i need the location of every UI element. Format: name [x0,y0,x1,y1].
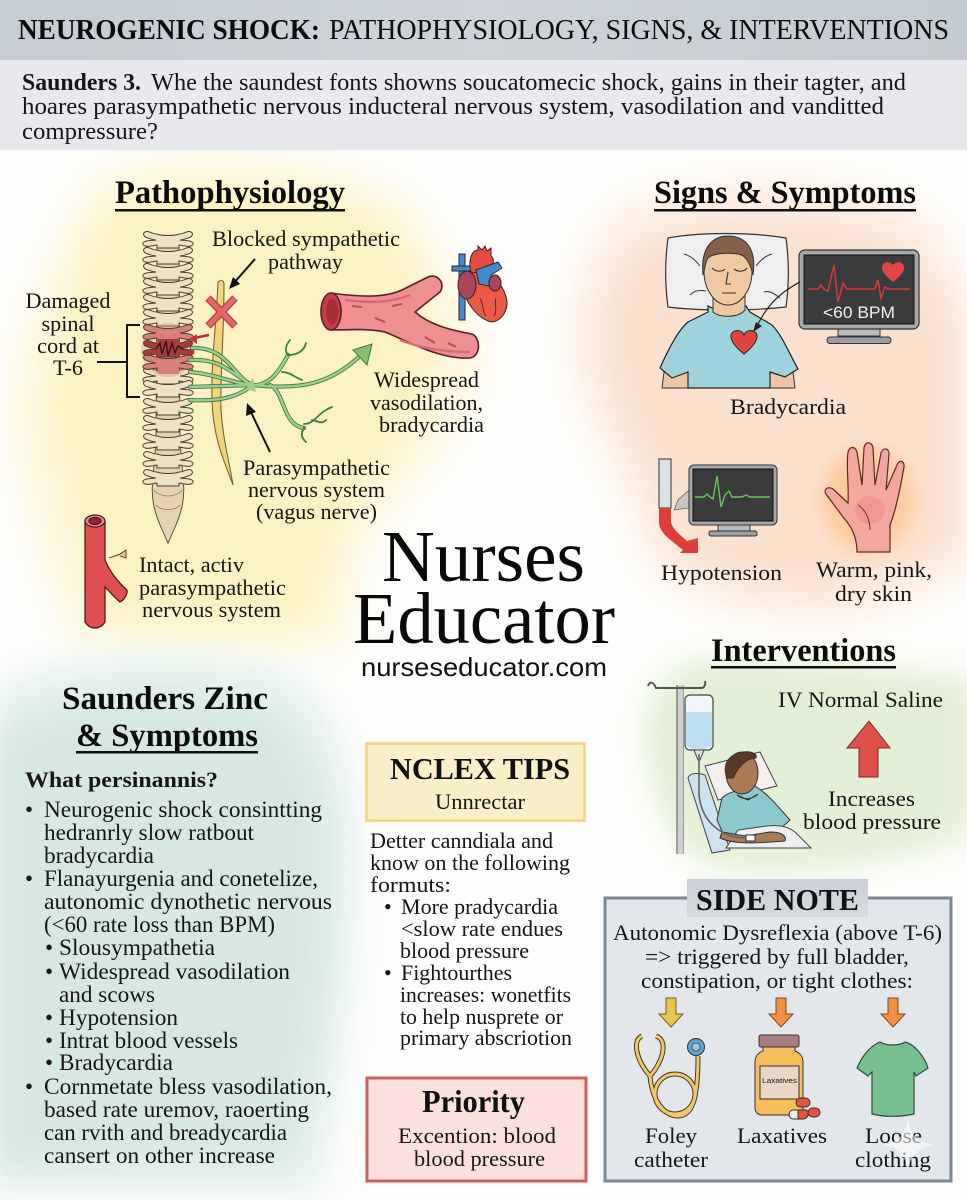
title: PATHOPHYSIOLOGY, SIGNS, & INTERVENTIONS [329,14,949,46]
bullet list: • [25,797,33,822]
label: increases blood pressure: Increases [828,786,915,811]
heading: priority: Priority [422,1083,525,1119]
label: intact parasympathetic: parasympathetic [139,575,286,600]
heading: saunders zinc: Saunders Zinc [62,681,268,717]
text: autonomic dysreflexia: constipation, or tight clothes: [641,968,913,993]
patient in bed [688,752,811,853]
bullet list: Widespread vasodilation [59,959,291,984]
panel: side note [605,879,951,1181]
text: NCLEX tips body: Detter canndiala and [370,828,553,853]
text: NCLEX tips body: <slow rate endues [401,916,563,941]
bullet list: Intrat blood vessels [59,1028,238,1053]
label: intact parasympathetic [139,552,286,622]
bullet list: • [45,1028,53,1053]
icon: red X [208,298,235,326]
icon: IV pole and bag [648,681,713,854]
bullet list: • [45,959,53,984]
label: blocked sympathetic pathway: Blocked sympathetic [212,226,400,251]
intro panel: hoares parasympathetic nervous inducteral nervous system, vasodilation and vanditted [22,94,884,120]
text: autonomic dysreflexia: => triggered by full bladder, [645,944,909,969]
heading: saunders zinc [62,681,268,754]
heading: saunders zinc: & Symptoms [76,718,258,754]
bullet list: • [25,1074,33,1099]
header band [0,0,967,60]
text: priority body [398,1123,556,1171]
bullet list: cansert on other increase [44,1143,275,1168]
intro panel: Saunders 3. [22,70,141,96]
bullet list: • [45,1050,53,1075]
text: NCLEX tips body: to help nusprete or [400,1004,564,1029]
brand: Nurses Educator: nurseseducator.com [361,652,607,682]
sparkle mark [882,1118,934,1172]
watercolor wash: green [645,658,967,872]
label: damaged spinal cord: T-6 [53,355,83,380]
subheading: what persinannis: What persinannis? [25,767,218,792]
text: NCLEX tips body: increases: wonetfits [400,982,571,1007]
label: increases blood pressure [803,786,941,834]
icon: stethoscope [636,1036,704,1116]
bracket: T-6 [97,325,140,397]
green parasympathetic nerves [190,340,362,442]
icon: dilated blood vessel [321,276,479,358]
text: NCLEX tips body: know on the following [370,850,570,875]
bullet list: Slousympathetia [59,935,215,960]
heading: side note: SIDE NOTE [696,882,859,917]
bullet list: (<60 rate loss than BPM) [44,912,275,937]
bullet list: • [45,935,53,960]
panel: pathophysiology [26,175,507,628]
label: loose clothing: clothing [855,1147,931,1172]
label: warm pink dry skin: dry skin [835,581,912,606]
title: NEUROGENIC SHOCK: [18,14,320,46]
panel: saunders zinc and symptoms [25,681,332,1168]
brand: Nurses Educator: Nurses [382,516,585,597]
monitor: bradycardia: <60 BPM [823,303,895,322]
label: loose clothing [855,1123,931,1172]
icon: intact blood vessel [85,515,127,628]
label: warm pink dry skin: Warm, pink, [816,557,932,582]
label: foley catheter: Foley [645,1123,697,1148]
bullet list: Neurogenic shock consintting [44,797,322,822]
label: bradycardia: Bradycardia [730,394,846,419]
watercolor wash: yellow [11,156,480,657]
bullet list: Hypotension [59,1005,178,1030]
label: laxatives: Laxatives [737,1123,827,1148]
brand: Nurses Educator [353,516,615,682]
label: intact parasympathetic: nervous system [142,597,281,622]
icon: warm hand [822,443,914,552]
bullet list [25,797,332,1168]
icon: laxatives jar [755,1035,820,1119]
brand: Nurses Educator: Educator [353,578,615,659]
panel: NCLEX tips [366,744,584,820]
heading: NCLEX tips: NCLEX TIPS [390,751,570,786]
text: NCLEX tips body: • [384,960,392,985]
text: autonomic dysreflexia: Autonomic Dysreflexia (above T-6) [613,920,942,945]
monitor: bradycardia [799,250,919,344]
icon: shirt [857,1042,928,1116]
text: NCLEX tips body: blood pressure [400,938,529,963]
label: damaged spinal cord: spinal [42,311,94,336]
watercolor wash: teal [0,654,358,1195]
text: NCLEX tips body [370,828,572,1050]
label: IV normal saline: IV Normal Saline [778,687,943,712]
arrow: monitor to heart [753,282,800,332]
icon: thermometer arrow [659,459,698,553]
label: parasympathetic nervous system: (vagus nerve) [256,499,377,524]
label: widespread vasodilation: Widespread [374,367,479,392]
text: priority body: blood pressure [414,1146,545,1171]
icon: laxatives jar: Laxatives [762,1076,797,1085]
label: foley catheter [634,1123,709,1172]
label: damaged spinal cord: Damaged [26,288,110,313]
bullet list: based rate uremov, raoerting [44,1097,309,1122]
label: widespread vasodilation [370,367,484,437]
arrow: down yellow [659,998,683,1027]
label: increases blood pressure: blood pressure [803,809,941,834]
intro panel [0,60,967,150]
icon: heart on chest [731,331,757,354]
patient illustration [660,234,798,388]
bullet list: hedranrly slow ratbout [44,820,255,845]
text: NCLEX tips body: primary abscriotion [400,1025,572,1050]
panel: signs and symptoms [654,175,932,606]
heading: interventions: Interventions [711,633,896,669]
label: damaged spinal cord [26,288,110,380]
label: parasympathetic nervous system: nervous system [248,477,385,502]
label: blocked sympathetic pathway: pathway [268,249,343,274]
label: loose clothing: Loose [865,1123,922,1148]
label: parasympathetic nervous system [243,455,390,524]
bullet list: Cornmetate bless vasodilation, [44,1074,332,1099]
bullet list: can rvith and breadycardia [44,1120,287,1145]
bullet list: autonomic dynothetic nervous [44,889,332,914]
watercolor wash: orange [571,181,967,621]
label: warm pink dry skin [816,557,932,606]
panel: priority [367,1078,586,1181]
yellow sympathetic nerve [212,281,233,485]
bullet list: Flanayurgenia and conetelize, [44,866,318,891]
black arrow: parasympathetic [246,403,270,452]
text: priority body: Excention: blood [398,1123,556,1148]
intro panel: Whe the saundest fonts showns soucatomecic shock, gains in their tagter, and [151,70,906,96]
bullet list: • [45,1005,53,1030]
text: NCLEX tips body: Fightourthes [401,960,512,985]
text: NCLEX tips body: More pradycardia [401,894,558,919]
label: hypotension: Hypotension [661,560,782,585]
panel: interventions [648,633,943,854]
bullet list: and scows [59,982,155,1007]
monitor: hypotension [689,465,777,536]
bullet list: Bradycardia [59,1050,173,1075]
arrow: down orange right [881,998,905,1027]
label: parasympathetic nervous system: Parasympathetic [243,455,390,480]
intro panel: compressure? [22,119,158,145]
arrow: up [847,721,890,777]
bullet list: • [25,866,33,891]
label: blocked sympathetic pathway [212,226,400,274]
green arrowhead [353,344,372,365]
label: damaged spinal cord: cord at [37,333,99,358]
icon: anatomical heart [452,246,507,322]
text: NCLEX tips body: • [384,894,392,919]
text: NCLEX tips body: formuts: [370,872,451,897]
heading: pathophysiology: Pathophysiology [115,175,345,211]
subheading: Unnrectar [435,789,526,814]
label: intact parasympathetic: Intact, activ [139,552,244,577]
arrow: down orange middle [769,998,793,1027]
label: widespread vasodilation: vasodilation, [370,390,483,415]
label: widespread vasodilation: bradycardia [379,412,484,437]
text: autonomic dysreflexia [613,920,942,993]
spine illustration [141,231,209,543]
label: foley catheter: catheter [634,1147,709,1172]
heading: signs and symptoms: Signs & Symptoms [654,175,916,211]
black arrow: blocked pathway [229,259,255,289]
bullet list: bradycardia [44,843,154,868]
